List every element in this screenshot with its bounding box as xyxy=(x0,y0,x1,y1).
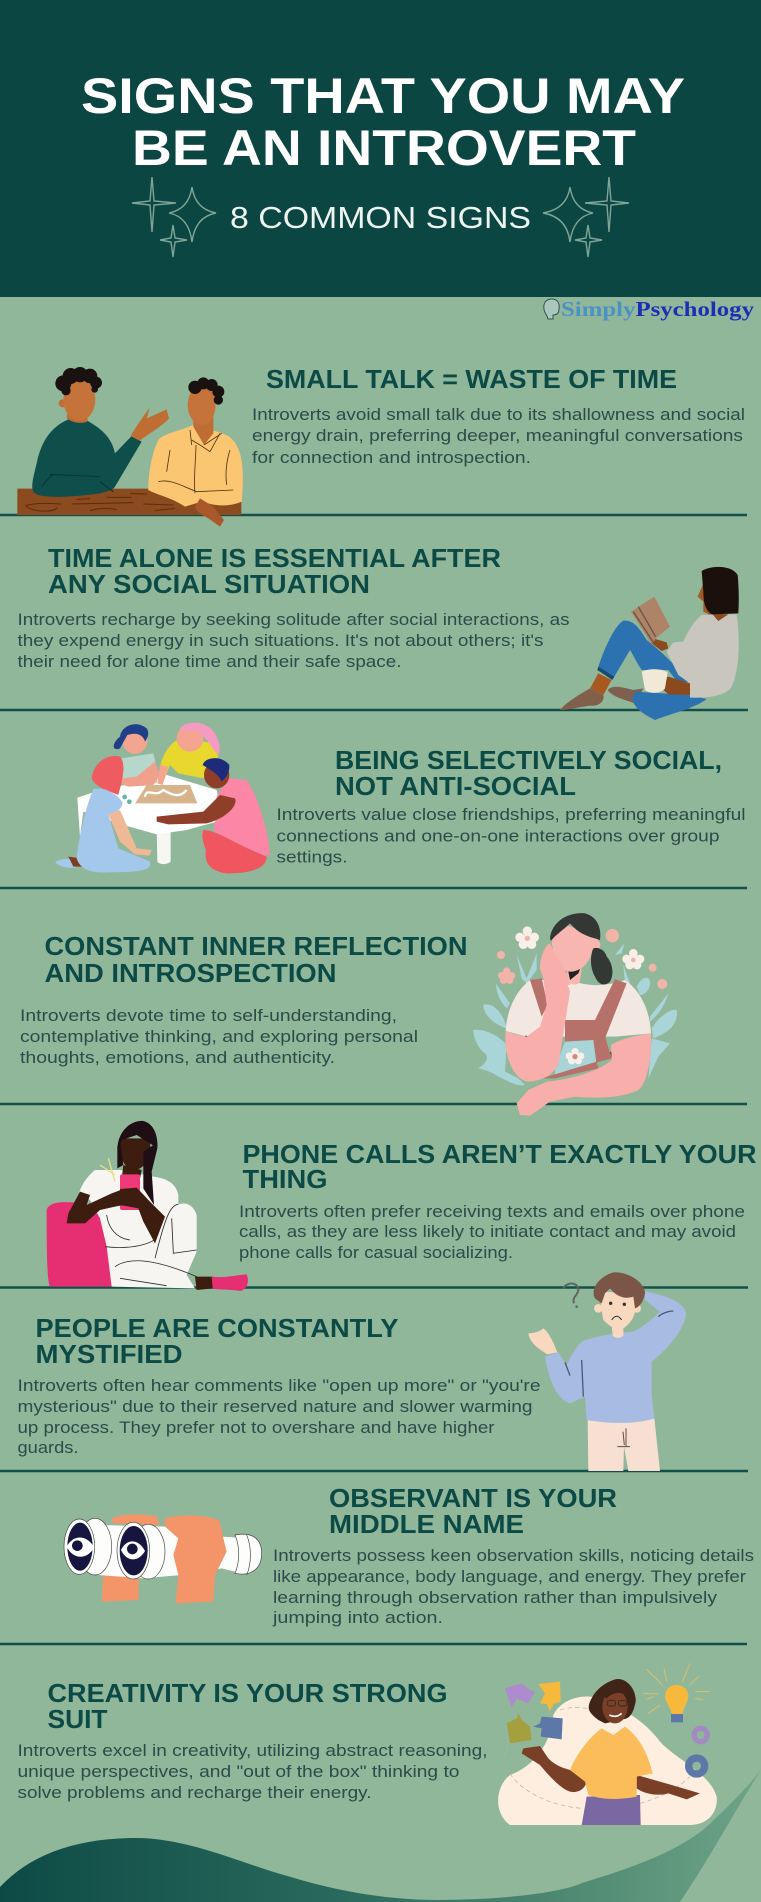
body text: guards. xyxy=(18,1438,78,1457)
body text: Introverts often prefer receiving texts and emails over phone xyxy=(239,1202,745,1221)
body text: Introverts excel in creativity, utilizing abstract reasoning, xyxy=(18,1741,488,1760)
body text: phone calls for casual socializing. xyxy=(239,1243,513,1262)
icon: woman on phone xyxy=(47,1121,248,1291)
title: SIGNS THAT YOU MAY xyxy=(81,68,685,124)
panel: phone calls xyxy=(0,1121,757,1291)
subtitle: 8 COMMON SIGNS xyxy=(230,200,531,235)
body text: Introverts often hear comments like "open up more" or "you're xyxy=(18,1376,540,1395)
heading: MYSTIFIED xyxy=(36,1339,182,1369)
heading: SMALL TALK = WASTE OF TIME xyxy=(266,364,677,394)
body text xyxy=(239,1202,745,1262)
heading: NOT ANTI-SOCIAL xyxy=(335,771,576,801)
body text: up process. They prefer not to overshare and have higher xyxy=(18,1418,495,1437)
body text: Introverts avoid small talk due to its shallowness and social xyxy=(252,405,745,424)
body text: energy drain, preferring deeper, meaningful conversations xyxy=(252,426,743,445)
body text xyxy=(18,1376,540,1457)
heading: SUIT xyxy=(48,1704,108,1734)
icon: two men talking xyxy=(17,367,243,527)
heading: THING xyxy=(242,1164,328,1194)
body text: thoughts, emotions, and authenticity. xyxy=(20,1048,335,1067)
body text: connections and one-on-one interactions over group xyxy=(276,826,720,846)
body text xyxy=(18,1741,488,1802)
body text xyxy=(252,405,745,467)
panel: inner reflection xyxy=(0,913,747,1116)
body text: mysterious" due to their reserved nature and slower warming xyxy=(18,1397,532,1416)
icon: four friends at a table xyxy=(55,723,270,873)
body text: like appearance, body language, and energy. They prefer xyxy=(273,1567,746,1586)
body text: unique perspectives, and "out of the box" thinking to xyxy=(18,1762,460,1781)
header band xyxy=(0,0,761,297)
heading: CREATIVITY IS YOUR STRONG xyxy=(48,1678,448,1708)
icon: logo head xyxy=(544,299,559,319)
body text: Introverts devote time to self-understanding, xyxy=(20,1006,397,1025)
body text: Introverts possess keen observation skills, noticing details xyxy=(273,1546,754,1565)
heading xyxy=(48,543,501,599)
icon: creative woman with puzzle pieces xyxy=(498,1663,717,1825)
heading xyxy=(242,1139,757,1194)
icon: woman reading xyxy=(560,567,739,720)
body text xyxy=(276,805,746,866)
body text: their need for alone time and their safe space. xyxy=(18,652,402,671)
panel: small talk xyxy=(0,364,747,527)
body text: contemplative thinking, and exploring personal xyxy=(20,1027,418,1046)
logo wordmark: Simply Psychology xyxy=(561,297,755,321)
icon: binoculars in hands xyxy=(64,1514,262,1603)
body text: they expend energy in such situations. It's not about others; it's xyxy=(18,631,544,650)
body text: settings. xyxy=(276,848,348,866)
title xyxy=(81,68,685,176)
body text: Introverts value close friendships, preferring meaningful xyxy=(276,805,746,824)
body text: for connection and introspection. xyxy=(252,448,531,467)
icon: thoughtful woman with flowers xyxy=(473,913,677,1116)
body text xyxy=(272,1546,754,1627)
body text: jumping into action. xyxy=(272,1608,443,1627)
heading: BEING SELECTIVELY SOCIAL, xyxy=(335,745,722,775)
heading xyxy=(48,1678,448,1734)
heading: OBSERVANT IS YOUR xyxy=(329,1483,617,1513)
title: BE AN INTROVERT xyxy=(132,120,636,176)
body text xyxy=(20,1006,418,1067)
icon: sparkles right xyxy=(543,177,629,257)
logo: SimplyPsychology xyxy=(544,297,755,321)
body text: learning through observation rather than impulsively xyxy=(273,1588,718,1607)
heading: PEOPLE ARE CONSTANTLY xyxy=(36,1313,398,1343)
bottom wave xyxy=(0,1770,761,1902)
heading xyxy=(44,931,468,988)
body text xyxy=(18,610,570,671)
icon: sparkles left xyxy=(132,177,216,257)
panel: mystified xyxy=(0,1272,748,1471)
icon: confused man xyxy=(528,1272,686,1471)
body text: calls, as they are less likely to initiate contact and may avoid xyxy=(239,1222,736,1241)
heading xyxy=(329,1483,617,1539)
heading: ANY SOCIAL SITUATION xyxy=(48,569,370,599)
heading: CONSTANT INNER REFLECTION xyxy=(44,931,468,961)
heading xyxy=(36,1313,398,1369)
heading: TIME ALONE IS ESSENTIAL AFTER xyxy=(48,543,501,573)
heading: AND INTROSPECTION xyxy=(44,958,336,988)
heading: MIDDLE NAME xyxy=(329,1509,524,1539)
heading: PHONE CALLS AREN’T EXACTLY YOUR xyxy=(242,1139,757,1169)
heading xyxy=(335,745,722,801)
panel: time alone xyxy=(0,543,748,720)
body text: solve problems and recharge their energy. xyxy=(18,1783,372,1802)
body text: Introverts recharge by seeking solitude after social interactions, as xyxy=(18,610,570,629)
panel: observant xyxy=(0,1483,754,1644)
panel: selectively social xyxy=(0,723,747,888)
panel: creativity xyxy=(18,1663,717,1825)
